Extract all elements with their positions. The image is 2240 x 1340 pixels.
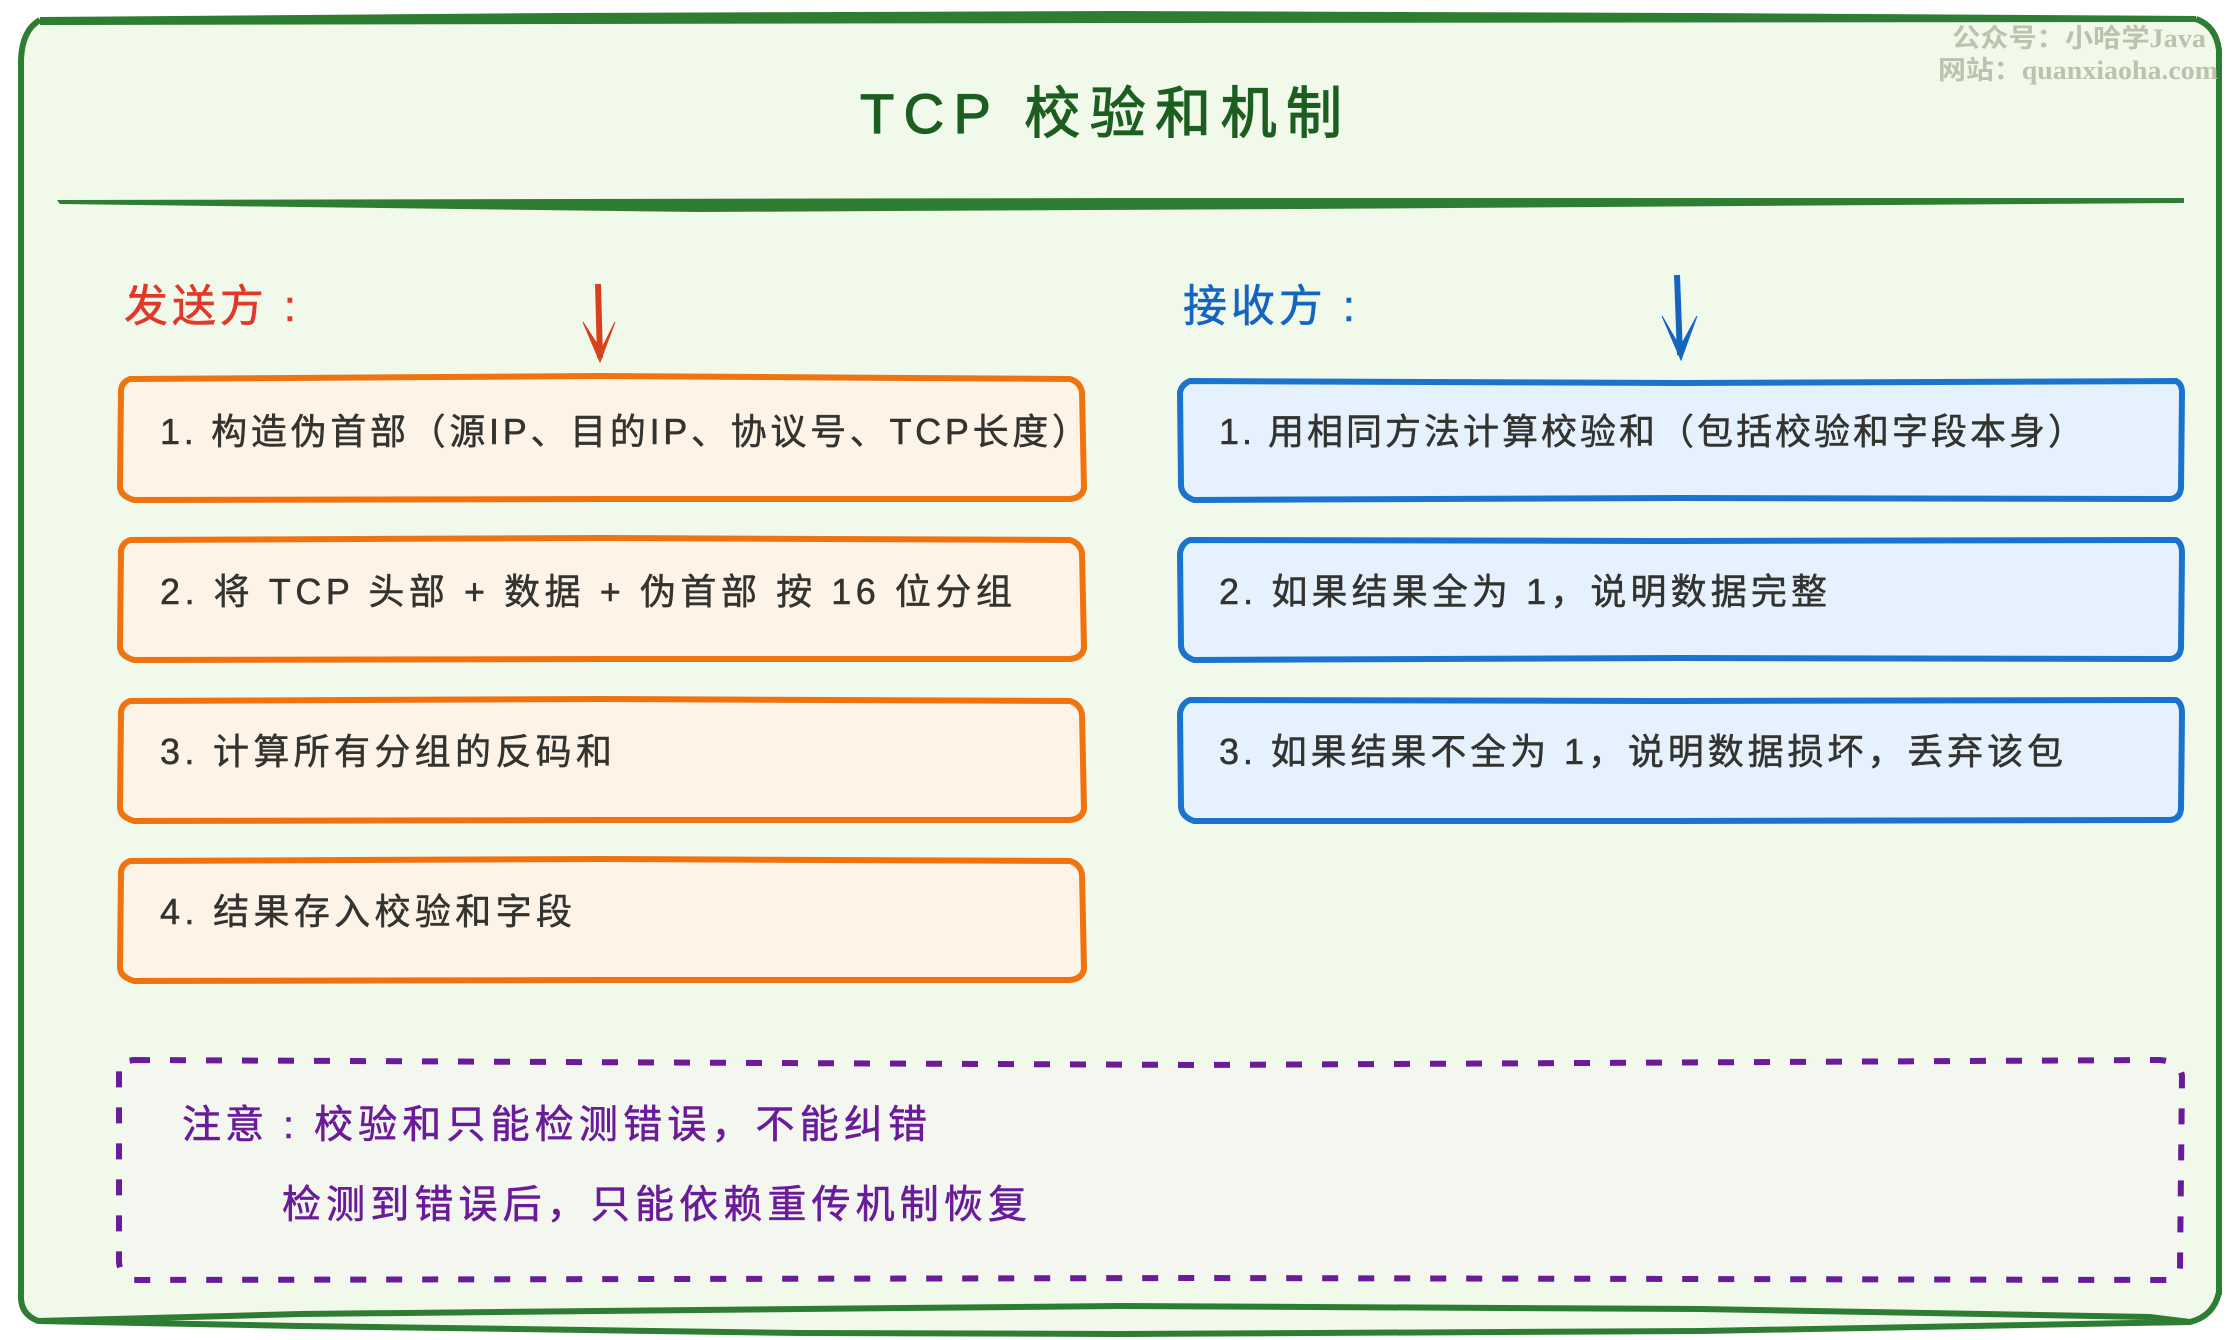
- note line 1: 注意 :: [182, 1104, 294, 1147]
- panel: receiver step 3: 3. 如果结果不全为 1，说明数据损坏，丢弃该包: [1219, 731, 2063, 772]
- panel: sender step 4: [120, 859, 1084, 981]
- panel: sender step 3: 3. 计算所有分组的反码和: [160, 731, 612, 772]
- heading: receiver: 接收方 :: [1183, 282, 1355, 331]
- heading: sender: 发送方 :: [124, 282, 296, 331]
- title: TCP 校验和机制: [860, 82, 1342, 145]
- panel: sender step 2: 2. 将 TCP 头部 + 数据 + 伪首部 按 16 位分组: [160, 571, 1012, 612]
- panel: sender step 1: [120, 376, 1088, 500]
- arrow: receiver: [1662, 275, 1697, 360]
- panel: receiver step 3: [1180, 700, 2182, 821]
- panel: sender step 2: [120, 538, 1084, 660]
- panel: sender step 4: 4. 结果存入校验和字段: [160, 891, 572, 932]
- arrow: sender: [583, 284, 615, 362]
- panel: receiver step 2: [1180, 540, 2182, 660]
- panel: receiver step 2: 2. 如果结果全为 1，说明数据完整: [1219, 571, 1827, 612]
- note line 2: 检测到错误后，只能依赖重传机制恢复: [282, 1184, 1027, 1227]
- panel: receiver step 1: 1. 用相同方法计算校验和（包括校验和字段本身）: [1219, 411, 2084, 452]
- watermark: [1938, 24, 2218, 85]
- watermark: 公众号：小哈学Java: [1952, 24, 2206, 53]
- watermark: 网站：quanxiaoha.com: [1938, 56, 2218, 85]
- panel: receiver step 1: [1180, 381, 2182, 500]
- note line 1: 校验和只能检测错误，不能纠错: [314, 1104, 927, 1147]
- panel: note: [119, 1060, 2182, 1280]
- panel: sender step 1: 1. 构造伪首部（源IP、目的IP、协议号、TCP长度）: [160, 411, 1088, 452]
- title divider: [57, 198, 2184, 212]
- panel: sender step 3: [120, 699, 1084, 821]
